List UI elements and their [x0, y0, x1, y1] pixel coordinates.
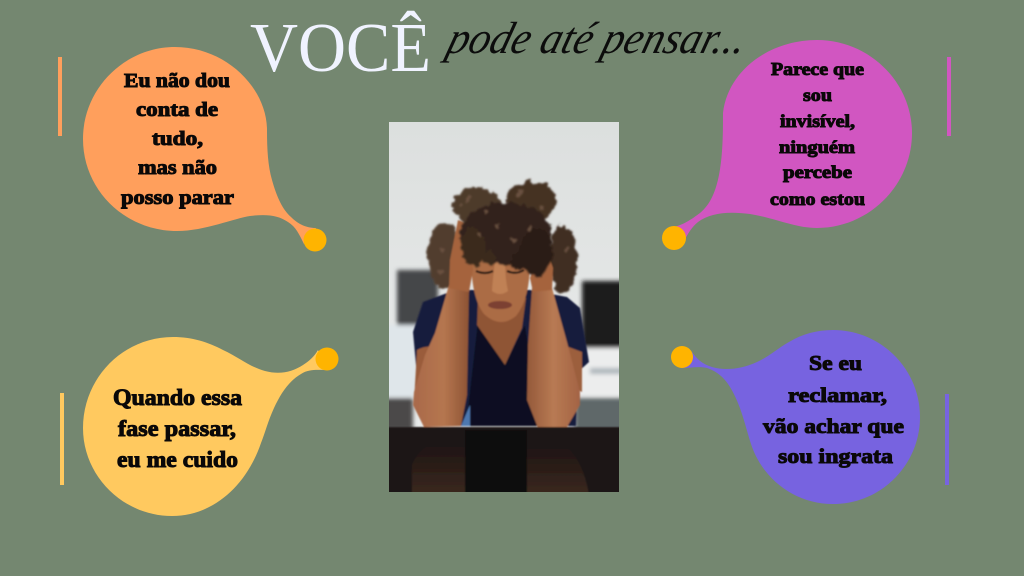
bubble text	[763, 351, 904, 468]
panel: violet speech bubble	[671, 330, 920, 504]
bubble text: Quando essa	[113, 385, 243, 410]
accent bar: violet	[945, 394, 949, 485]
table	[389, 426, 619, 492]
title phrase: pode até pensar: pode até pensar...	[439, 13, 753, 64]
bubble text: mas não	[138, 157, 217, 179]
hands	[449, 220, 473, 292]
sliver of chair	[461, 405, 470, 426]
pointer dot	[671, 346, 693, 368]
bubble text: Eu não dou	[124, 70, 230, 92]
hair highlights	[438, 191, 568, 274]
panel: orange speech bubble	[83, 47, 326, 252]
bubble text: fase passar,	[118, 416, 236, 441]
bubble text: percebe	[783, 162, 852, 182]
accent bar: magenta	[947, 57, 951, 136]
bubble text: como estou	[770, 189, 865, 209]
panel: yellow speech bubble	[83, 337, 338, 516]
pointer dot	[662, 226, 686, 250]
bubble text: invisível,	[780, 111, 855, 131]
forearms	[413, 285, 469, 427]
bubble text: tudo,	[152, 128, 203, 150]
shirt	[413, 290, 589, 426]
bubble text: ninguém	[779, 137, 855, 157]
panel: magenta speech bubble	[662, 40, 912, 250]
bubble text: sou	[803, 85, 832, 105]
face	[471, 259, 530, 322]
bubble text	[770, 59, 865, 209]
title	[250, 10, 753, 87]
bubble text: eu me cuido	[117, 447, 238, 472]
pointer dot	[316, 348, 338, 370]
bubble text: conta de	[136, 99, 218, 121]
back hair	[428, 222, 577, 293]
bubble text	[121, 70, 234, 209]
photo: stressed woman at desk	[389, 122, 619, 492]
bubble text: sou ingrata	[778, 444, 893, 468]
title word: VOCÊ: VOCÊ	[250, 10, 431, 87]
hair	[453, 181, 556, 276]
upper arms	[414, 345, 430, 390]
bubble text: posso parar	[121, 187, 234, 209]
infographic canvas	[58, 10, 951, 516]
bubble text: Se eu	[809, 351, 862, 375]
accent bar: yellow	[60, 393, 64, 485]
bubble text: vão achar que	[763, 414, 904, 438]
accent bar: orange	[58, 57, 62, 136]
neck	[477, 298, 526, 365]
pointer dot	[304, 228, 326, 252]
bubble text	[113, 385, 243, 472]
bubble text: reclamar,	[788, 383, 887, 407]
bubble text: Parece que	[771, 59, 864, 79]
